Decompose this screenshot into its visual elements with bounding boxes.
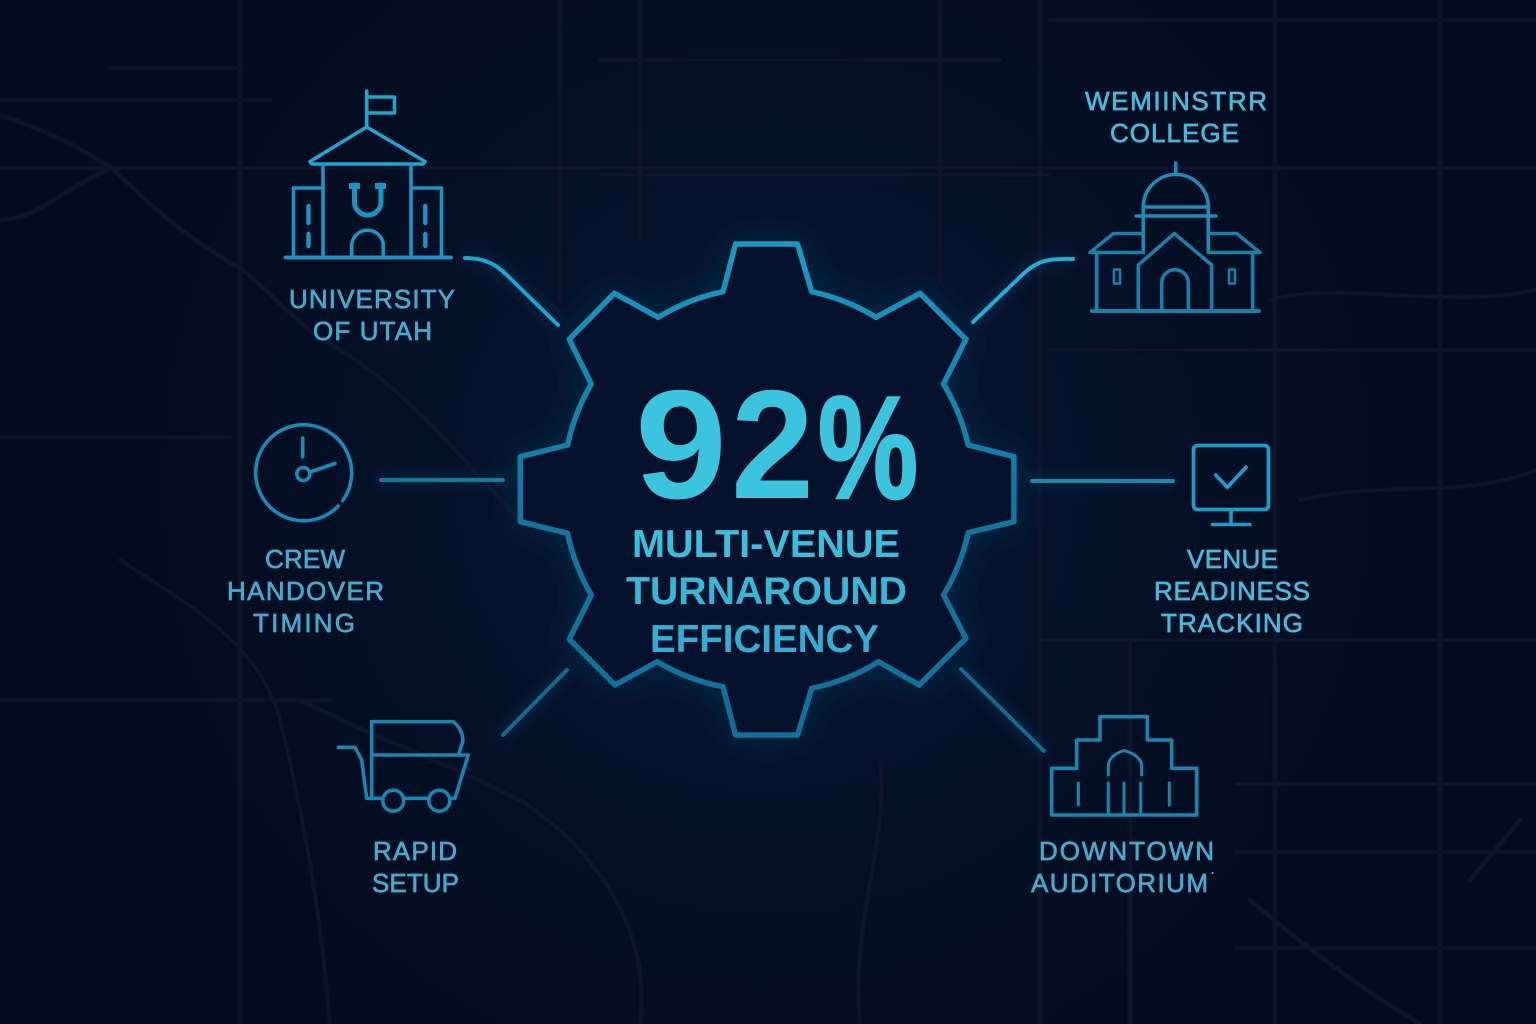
- label: crew handover timing: CREW: [265, 544, 345, 574]
- icon: college dome building: [1090, 163, 1260, 311]
- label: downtown auditorium: DOWNTOWN: [1039, 836, 1214, 866]
- label: downtown auditorium: [1031, 836, 1214, 898]
- label: venue readiness tracking: VENUE: [1187, 544, 1278, 574]
- icon: downtown auditorium: [1052, 717, 1197, 815]
- icon: clock: [256, 425, 352, 521]
- label: rapid setup: RAPID: [373, 836, 457, 866]
- label: university of utah: UNIVERSITY: [289, 284, 455, 314]
- icon: monitor with checkmark: [1194, 446, 1268, 524]
- connector glows: [381, 258, 1173, 751]
- connector: crew handover timing: [381, 478, 503, 482]
- icon: university building: [286, 91, 451, 258]
- connector: westminster college: [973, 259, 1073, 322]
- big number: 92%: 2: [731, 358, 814, 531]
- label: wemiinstrr college: WEMIINSTRR: [1085, 86, 1267, 116]
- connector: rapid setup: [503, 670, 567, 735]
- label: university of utah: [289, 284, 455, 346]
- icon: rapid setup cart: [338, 722, 468, 811]
- heading: multi-venue turnaround efficiency: EFFICIENCY: [650, 618, 879, 661]
- label: venue readiness tracking: READINESS: [1154, 576, 1310, 606]
- connector: downtown auditorium: [961, 669, 1044, 751]
- label: university of utah: OF UTAH: [313, 316, 432, 346]
- label: rapid setup: [372, 836, 459, 898]
- label: wemiinstrr college: COLLEGE: [1110, 118, 1239, 148]
- label: crew handover timing: [227, 544, 384, 638]
- label: crew handover timing: HANDOVER: [227, 576, 384, 606]
- label: crew handover timing: TIMING: [253, 608, 355, 638]
- big number: 92%: %: [818, 366, 918, 529]
- label: wemiinstrr college: [1085, 86, 1267, 148]
- connector: venue readiness tracking: [1032, 479, 1173, 483]
- big number: 92%: [635, 358, 918, 531]
- gear glow: [520, 244, 1014, 735]
- label: venue readiness tracking: TRACKING: [1161, 608, 1303, 638]
- label: rapid setup: SETUP: [372, 868, 459, 898]
- heading: multi-venue turnaround efficiency: TURNAROUND: [626, 570, 907, 613]
- central gear outline: [520, 244, 1014, 735]
- label: venue readiness tracking: [1154, 544, 1310, 638]
- heading: multi-venue turnaround efficiency: MULTI-VENUE: [632, 523, 900, 566]
- connector: university of utah: [465, 258, 558, 325]
- big number: 92%: 9: [635, 358, 727, 531]
- heading: multi-venue turnaround efficiency: [626, 523, 907, 661]
- label: downtown auditorium: AUDITORIUM: [1031, 868, 1208, 898]
